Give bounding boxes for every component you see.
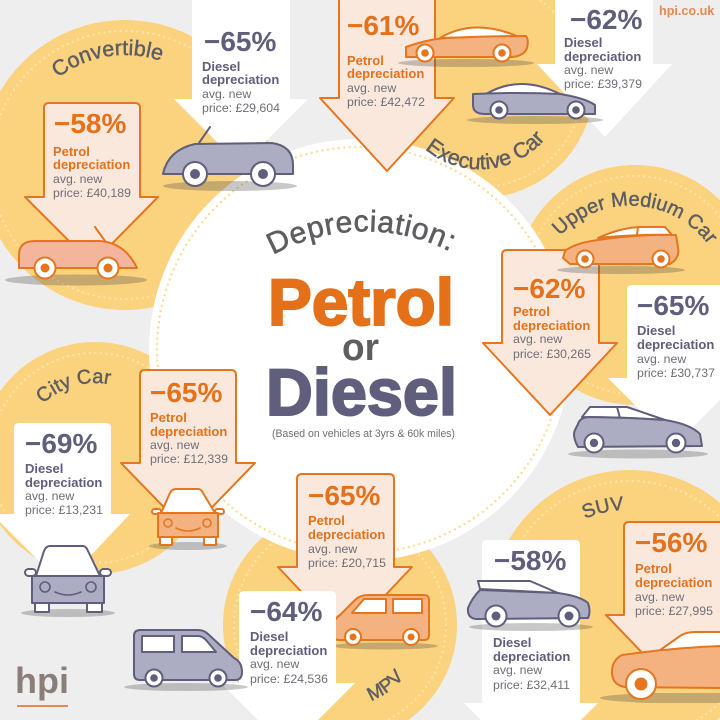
panel: executive diesel arrow: avg. new (564, 63, 613, 77)
panel: MPV petrol arrow (278, 474, 412, 638)
panel: upper medium petrol arrow: price: £30,265 (513, 347, 591, 361)
panel: upper medium diesel arrow: −65% (637, 290, 709, 321)
panel: city car diesel arrow: avg. new (25, 489, 74, 503)
icon: diesel MPV (124, 630, 248, 691)
text: basis note: (Based on vehicles at 3yrs & 60k miles) (272, 428, 455, 440)
panel: SUV diesel arrow: avg. new (493, 663, 542, 677)
panel: city car petrol arrow: avg. new (150, 438, 199, 452)
panel: city car diesel arrow (0, 423, 130, 585)
icon: petrol city car (149, 489, 227, 550)
panel: convertible petrol arrow: price: £40,189 (53, 186, 131, 200)
panel: executive petrol arrow (320, 0, 454, 171)
label: city car: City Car (37, 369, 112, 401)
panel: executive diesel arrow: depreciation (564, 49, 641, 64)
icon: petrol MPV (332, 595, 438, 650)
panel: city car diesel arrow: price: £13,231 (25, 503, 103, 517)
panel: executive petrol arrow: price: £42,472 (347, 95, 425, 109)
panel: SUV petrol arrow: avg. new (635, 590, 684, 604)
heading: petrol: Petrol (268, 265, 454, 339)
panel: SUV petrol arrow: depreciation (635, 575, 712, 590)
panel: SUV diesel arrow (464, 540, 598, 720)
panel: central white circle (149, 139, 571, 561)
panel: upper medium petrol arrow: Petrol (513, 304, 550, 319)
panel: executive petrol arrow: −61% (347, 10, 419, 41)
panel: SUV petrol arrow: −56% (635, 527, 707, 558)
panel: convertible diesel arrow: avg. new (202, 87, 251, 101)
icon: diesel SUV (468, 581, 593, 631)
panel: executive petrol arrow: Petrol (347, 53, 384, 68)
panel: SUV diesel arrow: depreciation (493, 649, 570, 664)
panel: city car circle (0, 342, 211, 574)
panel: convertible petrol arrow: avg. new (53, 172, 102, 186)
icon: diesel convertible (163, 127, 297, 191)
panel: convertible diesel arrow: depreciation (202, 72, 279, 87)
panel: upper medium petrol arrow: −62% (513, 273, 585, 304)
icon: petrol SUV (600, 632, 720, 703)
panel: upper medium diesel arrow: avg. new (637, 352, 686, 366)
panel: MPV petrol arrow: avg. new (308, 542, 357, 556)
panel: executive diesel arrow: −62% (570, 4, 642, 35)
panel: upper medium petrol arrow: depreciation (513, 318, 590, 333)
panel: convertible circle (0, 20, 270, 310)
panel: city car diesel arrow: −69% (25, 428, 97, 459)
panel: convertible diesel arrow: price: £29,604 (202, 101, 280, 115)
heading: depreciation: Depreciation: (266, 209, 455, 254)
icon: diesel executive car (467, 84, 603, 124)
panel: MPV diesel arrow: −64% (250, 596, 322, 627)
icon: diesel upper medium car (568, 407, 708, 458)
logo: hpi: hpi (15, 660, 69, 701)
panel: upper medium diesel arrow (608, 285, 720, 445)
panel: SUV petrol arrow: Petrol (635, 561, 672, 576)
panel: MPV circle (223, 508, 457, 720)
panel: executive diesel arrow: price: £39,379 (564, 77, 642, 91)
panel: upper medium petrol arrow: avg. new (513, 332, 562, 346)
panel: MPV petrol arrow: −65% (308, 480, 380, 511)
panel: upper medium diesel arrow: Diesel (637, 323, 675, 338)
panel: executive diesel arrow (537, 0, 672, 137)
panel: convertible petrol arrow (25, 103, 158, 264)
label: executive car: Executive Car (426, 131, 543, 170)
panel: SUV petrol arrow: price: £27,995 (635, 604, 713, 618)
panel: MPV diesel arrow: depreciation (250, 643, 327, 658)
icon: petrol executive car (398, 27, 534, 67)
panel: executive petrol arrow: avg. new (347, 81, 396, 95)
panel: convertible petrol arrow: −58% (54, 108, 126, 139)
panel: MPV diesel arrow: price: £24,536 (250, 672, 328, 686)
panel: MPV diesel arrow: Diesel (250, 629, 288, 644)
icon: petrol upper medium car (557, 227, 685, 274)
panel: executive petrol arrow: depreciation (347, 66, 424, 81)
panel: convertible diesel arrow (174, 0, 308, 166)
panel: MPV diesel arrow: avg. new (250, 657, 299, 671)
panel: city car petrol arrow: −65% (150, 377, 222, 408)
label: SUV: SUV (582, 496, 623, 518)
icon: petrol convertible (5, 227, 147, 286)
panel: SUV diesel arrow: −58% (494, 545, 566, 576)
panel: city car petrol arrow (121, 370, 255, 532)
panel: MPV petrol arrow: price: £20,715 (308, 556, 386, 570)
icon: diesel city car (21, 546, 115, 617)
panel: convertible diesel arrow: Diesel (202, 59, 240, 74)
panel: city car petrol arrow: Petrol (150, 410, 187, 425)
panel: convertible petrol arrow: depreciation (53, 157, 130, 172)
panel: SUV petrol arrow (606, 522, 720, 684)
panel: upper medium petrol arrow (483, 250, 617, 415)
label: convertible: Convertible (52, 39, 162, 75)
panel: executive diesel arrow: Diesel (564, 35, 602, 50)
panel: convertible petrol arrow: Petrol (53, 144, 90, 159)
label: MPV: MPV (366, 668, 401, 701)
panel: city car diesel arrow: Diesel (25, 461, 63, 476)
heading: or: or (342, 327, 379, 369)
panel: MPV petrol arrow: Petrol (308, 513, 345, 528)
panel: city car petrol arrow: depreciation (150, 424, 227, 439)
panel: SUV circle (490, 470, 720, 720)
panel: executive car circle (366, 0, 594, 198)
panel: city car petrol arrow: price: £12,339 (150, 452, 228, 466)
heading: diesel: Diesel (266, 355, 457, 429)
panel: SUV diesel arrow: price: £32,411 (493, 678, 570, 692)
panel: upper medium diesel arrow: depreciation (637, 337, 714, 352)
panel: SUV diesel arrow: Diesel (493, 635, 531, 650)
brand: website: hpi.co.uk (659, 4, 715, 18)
panel: upper medium diesel arrow: price: £30,737 (637, 366, 715, 380)
panel: MPV diesel arrow (221, 591, 355, 720)
panel: city car diesel arrow: depreciation (25, 475, 102, 490)
panel: convertible diesel arrow: −65% (204, 26, 276, 57)
panel: upper medium car circle (515, 165, 720, 405)
label: upper medium car: Upper Medium Car (551, 192, 717, 242)
panel: MPV petrol arrow: depreciation (308, 527, 385, 542)
